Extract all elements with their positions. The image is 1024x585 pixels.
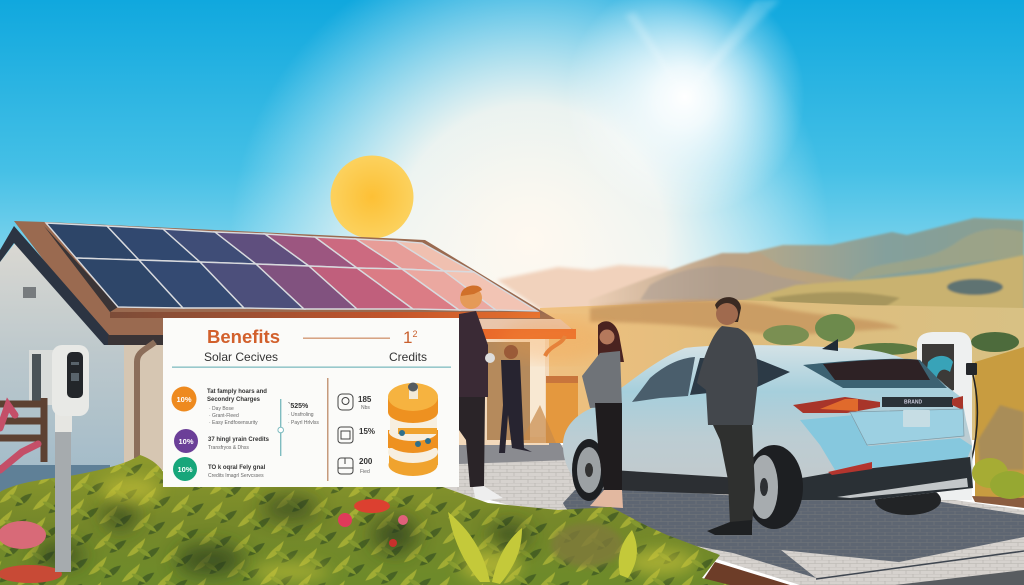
roof	[14, 221, 576, 345]
blue reflection on rear	[800, 415, 972, 470]
brand text: BRAND	[904, 400, 922, 406]
front wheel	[572, 439, 606, 501]
porch wall and entrance	[459, 335, 549, 445]
rear hatch panel	[850, 409, 964, 445]
subheading: credits: Credits	[389, 350, 427, 364]
item one badge: 10%	[176, 395, 192, 404]
window	[29, 350, 55, 405]
heading number: 1	[403, 328, 412, 347]
percent note: · Unsfroling	[288, 412, 314, 418]
teal divider	[172, 366, 451, 368]
dark foliage shadows	[36, 497, 530, 575]
wooden fence by driveway	[520, 376, 578, 443]
rear wheel	[745, 445, 803, 529]
icon: document	[338, 458, 353, 474]
stat one	[358, 395, 372, 411]
person: man in orange light	[459, 285, 503, 502]
golden plains	[540, 300, 1024, 500]
soil	[700, 562, 790, 585]
item one text: Tat famply hoars and	[207, 389, 267, 395]
item three badge	[173, 457, 197, 481]
pink flowers left	[0, 521, 62, 583]
pink blossom branch	[0, 405, 38, 470]
item two badge: 10%	[178, 437, 194, 446]
warm light haze	[500, 318, 610, 362]
dry brown shrub	[551, 523, 623, 567]
heading rule	[303, 338, 390, 339]
road	[895, 570, 1024, 585]
stat two: 15%	[359, 427, 375, 436]
item one text	[207, 389, 267, 426]
side window	[632, 357, 695, 402]
card panel	[163, 318, 459, 487]
stat one: 185	[358, 395, 372, 404]
wall column	[124, 345, 166, 470]
foreground garden	[0, 455, 790, 585]
person: man in background	[499, 345, 532, 453]
far rear wheel	[875, 485, 941, 515]
icon: calculator	[338, 427, 353, 443]
sun with rays	[560, 0, 810, 220]
percent note: · Payrl Hrlvlss	[288, 420, 319, 426]
house shadow on ground	[459, 443, 570, 464]
roof fin	[822, 339, 838, 351]
infographic card	[163, 318, 459, 487]
driveway	[440, 443, 1024, 585]
yellow sun disc	[330, 156, 414, 238]
large leaves	[448, 512, 637, 584]
heading: benefits: Benefits	[207, 326, 280, 347]
item one text: · Day Bose	[209, 406, 234, 412]
stat three: 200	[359, 457, 373, 466]
tail light left	[793, 397, 880, 413]
right side bushes	[972, 405, 1024, 508]
left EV charger post	[52, 345, 89, 572]
item three text: Credits Imagrl Servcsses	[208, 473, 264, 479]
item three text: TO k oqral Fely gnal	[208, 465, 266, 471]
tail light right	[952, 396, 963, 410]
item one text: Secondry Charges	[207, 397, 261, 403]
distant pink mountains	[497, 265, 700, 310]
item two text	[208, 437, 270, 451]
percent note: `525%	[288, 403, 309, 410]
item one badge	[172, 386, 196, 412]
red flowers	[338, 499, 408, 547]
tan mountain	[589, 253, 851, 305]
ground at left	[0, 465, 110, 492]
car body	[563, 345, 973, 500]
timeline connector	[278, 399, 284, 456]
blue mountain range	[749, 218, 1024, 310]
vertical divider	[327, 378, 328, 481]
trees	[763, 314, 1019, 355]
right gutter	[545, 336, 565, 356]
person: woman	[582, 321, 624, 508]
fence	[0, 398, 46, 462]
right EV charger	[917, 332, 977, 500]
lower red reflector	[828, 462, 872, 475]
person: man in grey suit	[697, 297, 758, 535]
battery stack illustration	[388, 382, 438, 476]
subheading: solar cecives: Solar Cecives	[204, 350, 278, 364]
item three text	[208, 465, 266, 479]
stat one: Nbs	[361, 405, 370, 411]
item three badge: 10%	[177, 465, 193, 474]
solar panels	[46, 223, 537, 311]
car shadow	[563, 488, 1024, 578]
item two text: Transfryos & Dhss	[208, 445, 249, 451]
sunlit foliage	[100, 478, 695, 581]
percent note	[288, 403, 319, 426]
stat three: Fied	[360, 469, 370, 475]
rear window	[803, 359, 947, 388]
item one text: · Easy Endfoxensurity	[209, 420, 258, 426]
stat three	[359, 457, 373, 475]
sky background	[0, 0, 1024, 340]
house	[0, 221, 576, 492]
heading number: 2	[412, 329, 417, 339]
garden mass	[0, 455, 730, 585]
item one text: · Grant-Fleed	[209, 413, 239, 419]
icon: lightbulb	[338, 394, 353, 410]
item two text: 37 hingl yrain Credits	[208, 437, 270, 443]
lower side skirt	[612, 470, 795, 497]
license plate	[903, 410, 930, 427]
golden hills	[739, 255, 1024, 320]
wall lamp	[23, 287, 36, 298]
item two badge	[174, 429, 198, 453]
leaf texture	[0, 455, 730, 585]
house wall	[0, 243, 165, 470]
EV car	[563, 339, 973, 529]
lower body trim	[790, 457, 973, 500]
downpipe	[137, 342, 155, 458]
